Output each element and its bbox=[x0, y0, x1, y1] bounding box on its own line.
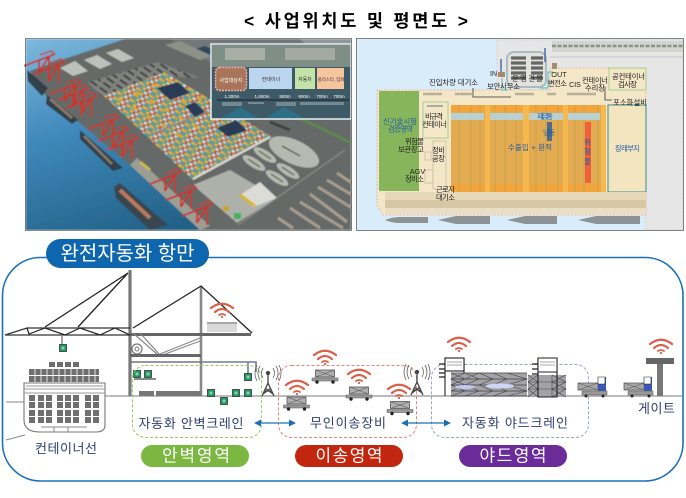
badge: quay zone: 안벽영역 bbox=[162, 446, 230, 466]
arrow: transfer to yard bbox=[401, 420, 451, 426]
empty container inspection bbox=[609, 68, 646, 90]
road lines bbox=[238, 150, 345, 225]
vessels at quay bbox=[27, 70, 123, 171]
arrow: quay to transfer bbox=[254, 420, 296, 426]
panel: aerial site photo bbox=[24, 38, 352, 230]
label: quay crane: 자동화 안벽크레인 bbox=[138, 416, 244, 431]
quay strip bbox=[130, 158, 210, 230]
plan labels: OUT bbox=[551, 70, 567, 79]
plan labels: 위험물 bbox=[405, 137, 424, 146]
panel: site floor plan bbox=[356, 38, 684, 230]
light oval pads bbox=[241, 130, 324, 189]
plan labels: 컨테이너 bbox=[582, 76, 608, 85]
ground line bbox=[111, 395, 682, 397]
badge: yard zone: 야드영역 bbox=[480, 446, 546, 466]
container hoist and ground containers bbox=[60, 344, 252, 404]
dark lanes bbox=[88, 62, 200, 98]
icon: antenna right bbox=[404, 364, 430, 395]
plan labels bbox=[398, 70, 647, 202]
inset location map bbox=[211, 44, 351, 119]
icon: automated yard crane bbox=[439, 338, 566, 397]
zone box: yard bbox=[432, 364, 588, 438]
container yard bbox=[104, 72, 272, 180]
plan labels: 보관창고 bbox=[398, 145, 424, 154]
gate apron strip bbox=[423, 93, 596, 95]
plan labels: AGV bbox=[410, 167, 425, 176]
heading pill: 완전자동화 항만 bbox=[60, 242, 194, 265]
upper road area bbox=[497, 40, 683, 230]
parked rows bbox=[278, 173, 352, 228]
plan labels: 대기소 bbox=[436, 193, 455, 202]
panel: site floor plan: 수출입 + 환적 bbox=[508, 143, 552, 152]
operations building bbox=[507, 52, 546, 87]
inset location map: 자동차 bbox=[298, 76, 312, 83]
workshops bbox=[433, 141, 446, 189]
pads bbox=[60, 49, 134, 76]
label: container ship: 컨테이너선 bbox=[35, 441, 97, 456]
badge: yard zone bbox=[459, 445, 567, 467]
plan labels: 정비소 bbox=[405, 174, 424, 184]
plan labels: 공컨테이너 bbox=[612, 72, 645, 81]
plan labels: 공장 bbox=[432, 154, 445, 163]
panel: fully automated port frame bbox=[2, 258, 683, 481]
plan labels: 정비 bbox=[432, 146, 445, 155]
label: AGV: 무인이송장비 bbox=[310, 416, 386, 430]
AGV vehicles bbox=[284, 351, 413, 415]
badge: transfer zone: 이송영역 bbox=[316, 446, 382, 466]
plan labels: 컨테이너 bbox=[422, 120, 447, 129]
break-bulk area bbox=[423, 102, 448, 138]
red gantry cranes bbox=[24, 51, 55, 75]
title: < 사업위치도 및 평면도 > bbox=[244, 11, 468, 31]
main yard bbox=[451, 105, 606, 192]
plan labels: 보안사무소 bbox=[487, 82, 520, 91]
panel: site floor plan: 험 bbox=[584, 147, 591, 156]
inset location map: 900m bbox=[279, 94, 291, 99]
panel: site floor plan: 장래부지 bbox=[615, 144, 640, 153]
inset location map: 900m bbox=[298, 94, 310, 99]
panel: site floor plan: 신기술시험 bbox=[383, 117, 417, 126]
inset location map: 사업대상지 bbox=[219, 77, 243, 84]
icon: container ship bbox=[24, 362, 105, 432]
reserved land bbox=[608, 105, 646, 192]
plan labels: 변전소 bbox=[548, 79, 567, 88]
plan labels: 운영건물 bbox=[512, 74, 543, 83]
plan labels: IN bbox=[490, 71, 497, 78]
icon: gate truck bbox=[624, 377, 653, 398]
plan labels: 검사장 bbox=[618, 80, 637, 89]
icon: antenna left bbox=[255, 365, 281, 396]
inset location map: 700m bbox=[316, 94, 328, 99]
icon: quay crane bbox=[5, 270, 256, 404]
plan labels: CIS bbox=[569, 82, 581, 89]
plan labels: 포소화설비 bbox=[613, 98, 647, 107]
zone box: quay bbox=[132, 366, 262, 438]
panel: site floor plan: 재유통 bbox=[537, 112, 553, 121]
icon: yard truck bbox=[578, 377, 607, 398]
inset location map: 플러스터, 업화 bbox=[318, 76, 344, 83]
badge: transfer zone bbox=[295, 445, 403, 467]
site base bbox=[377, 68, 646, 215]
heading pill bbox=[46, 239, 209, 268]
panel: site floor plan: 검증영역 bbox=[388, 124, 413, 134]
plan labels: 수리장 bbox=[585, 84, 605, 92]
icon: gate bbox=[646, 340, 674, 396]
zone box: transfer bbox=[278, 366, 416, 438]
panel: site floor plan: 냉동 bbox=[543, 128, 555, 137]
leader lines bbox=[473, 87, 612, 100]
berthed vessels bbox=[385, 216, 640, 224]
plan labels: 근로자 bbox=[436, 185, 455, 194]
plan labels: 진입차량 대기소 bbox=[429, 78, 478, 87]
label: yard crane: 자동화 야드크레인 bbox=[462, 416, 568, 430]
icon: roof unit with wifi bbox=[207, 304, 237, 332]
green test area bbox=[379, 91, 419, 191]
plaza and depot bbox=[193, 170, 277, 223]
plan labels: 비규격 bbox=[425, 112, 443, 121]
label: gate: 게이트 bbox=[638, 401, 675, 416]
badge: quay zone bbox=[141, 445, 249, 467]
panel: site floor plan: 물 bbox=[584, 157, 591, 166]
inset location map: 700m bbox=[333, 94, 345, 99]
inset location map: 1,300m bbox=[224, 94, 240, 99]
inset location map: 1,600m bbox=[254, 94, 270, 99]
inset location map: 컨테이너 bbox=[262, 76, 280, 83]
panel: site floor plan: 위 bbox=[584, 138, 591, 147]
port land bbox=[30, 39, 351, 230]
quay apron bbox=[385, 192, 646, 200]
